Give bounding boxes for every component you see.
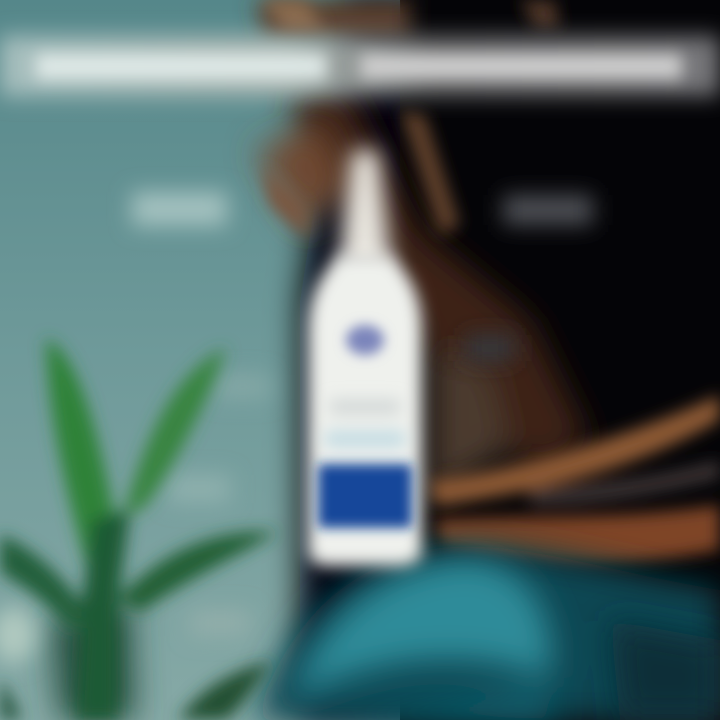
hair: brown strands (255, 90, 590, 500)
bottle (308, 150, 422, 566)
background: dark right side (300, 0, 720, 720)
teal shirt (255, 547, 720, 720)
background: dark right edge fill (400, 0, 720, 720)
bottle: body (308, 255, 422, 566)
right label (503, 195, 593, 225)
plant (0, 338, 278, 720)
top banner (0, 36, 720, 96)
plant: pale pot highlight (0, 607, 36, 663)
banner heading placeholder (36, 54, 682, 79)
bottle: blue label (318, 464, 412, 528)
small side labels (168, 335, 515, 636)
bottle: logo (346, 325, 384, 355)
bottle: small text band (325, 400, 405, 446)
left label (132, 192, 227, 226)
hair: warm lower sweep (262, 0, 720, 564)
bottle: nozzle (338, 150, 392, 270)
plant: leaves (0, 338, 278, 720)
plant: base shadow (50, 600, 135, 720)
hair: top strands (255, 0, 410, 40)
